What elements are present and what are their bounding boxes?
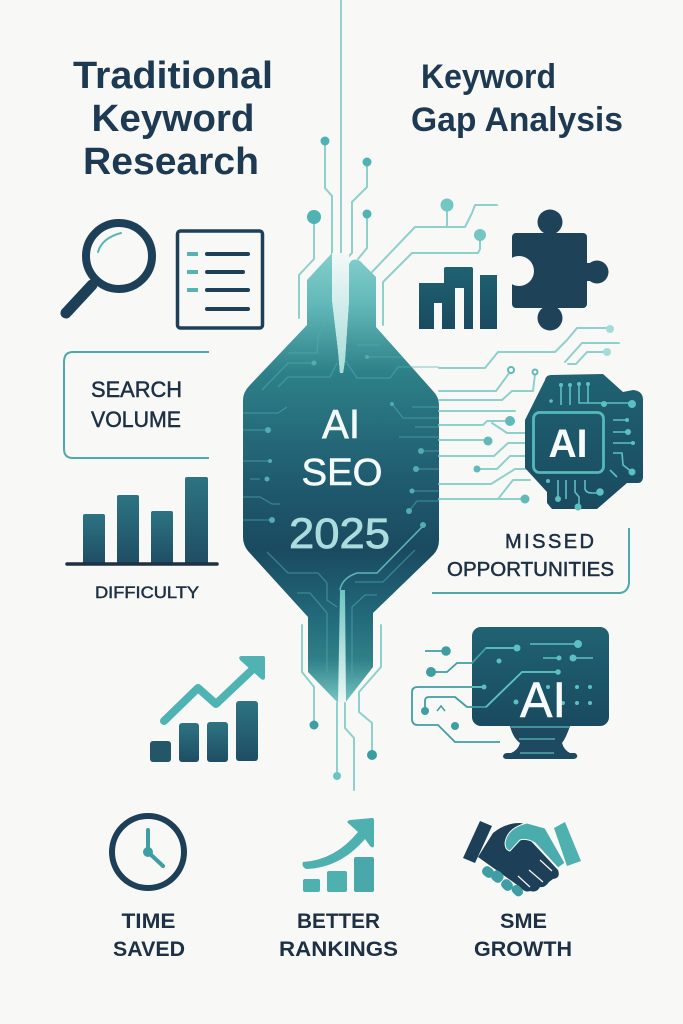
icon: AI chip: AI	[548, 422, 588, 466]
label: sme growth: SME	[500, 910, 547, 933]
icon: growth chart with arrow	[150, 656, 265, 762]
panel: missed opportunities: OPPORTUNITIES	[447, 559, 614, 581]
upper circuit traces with nodes	[299, 136, 497, 325]
icon: AI chip	[525, 374, 643, 510]
right circuit traces	[439, 325, 619, 504]
panel: search volume	[64, 352, 209, 458]
central hexagon chip: AI SEO 2025: AI	[322, 401, 360, 447]
title: keyword gap analysis	[411, 58, 623, 139]
label: sme growth	[474, 910, 572, 961]
central hexagon chip: AI SEO 2025	[243, 253, 439, 703]
panel: missed opportunities: MISSED	[505, 531, 594, 553]
label: time saved: SAVED	[113, 938, 185, 961]
icon: better rankings	[302, 818, 374, 892]
icon: keyword list document	[178, 231, 262, 328]
panel: search volume: SEARCH	[91, 377, 182, 402]
label: time saved	[113, 910, 185, 961]
icon: AI monitor	[412, 627, 609, 759]
label: time saved: TIME	[122, 910, 176, 933]
label: better rankings	[279, 910, 398, 961]
icon: puzzle piece	[504, 210, 608, 330]
label: difficulty: DIFFICULTY	[95, 583, 199, 602]
icon: handshake	[463, 821, 581, 898]
title: traditional keyword research: Research	[83, 141, 259, 183]
panel: search volume: VOLUME	[91, 407, 181, 432]
title: traditional keyword research: Traditional	[73, 55, 273, 97]
icon: magnifying glass	[66, 223, 152, 313]
label: better rankings: RANKINGS	[279, 938, 398, 961]
title: traditional keyword research: Keyword	[92, 98, 254, 140]
lower circuit traces with nodes	[302, 625, 381, 790]
icon: mini bars	[419, 267, 497, 329]
label: better rankings: BETTER	[297, 910, 380, 933]
icon: clock	[112, 816, 184, 888]
bar chart: difficulty	[67, 477, 217, 564]
central hexagon chip: AI SEO 2025: 2025	[289, 510, 390, 558]
title: keyword gap analysis: Gap Analysis	[411, 101, 623, 139]
panel: missed opportunities	[432, 528, 629, 593]
central hexagon chip: AI SEO 2025: SEO	[302, 452, 382, 494]
title: keyword gap analysis: Keyword	[421, 58, 556, 96]
center vertical line	[340, 0, 342, 370]
title: traditional keyword research	[73, 55, 273, 183]
label: sme growth: GROWTH	[474, 938, 572, 961]
icon: AI monitor: AI	[520, 672, 566, 728]
